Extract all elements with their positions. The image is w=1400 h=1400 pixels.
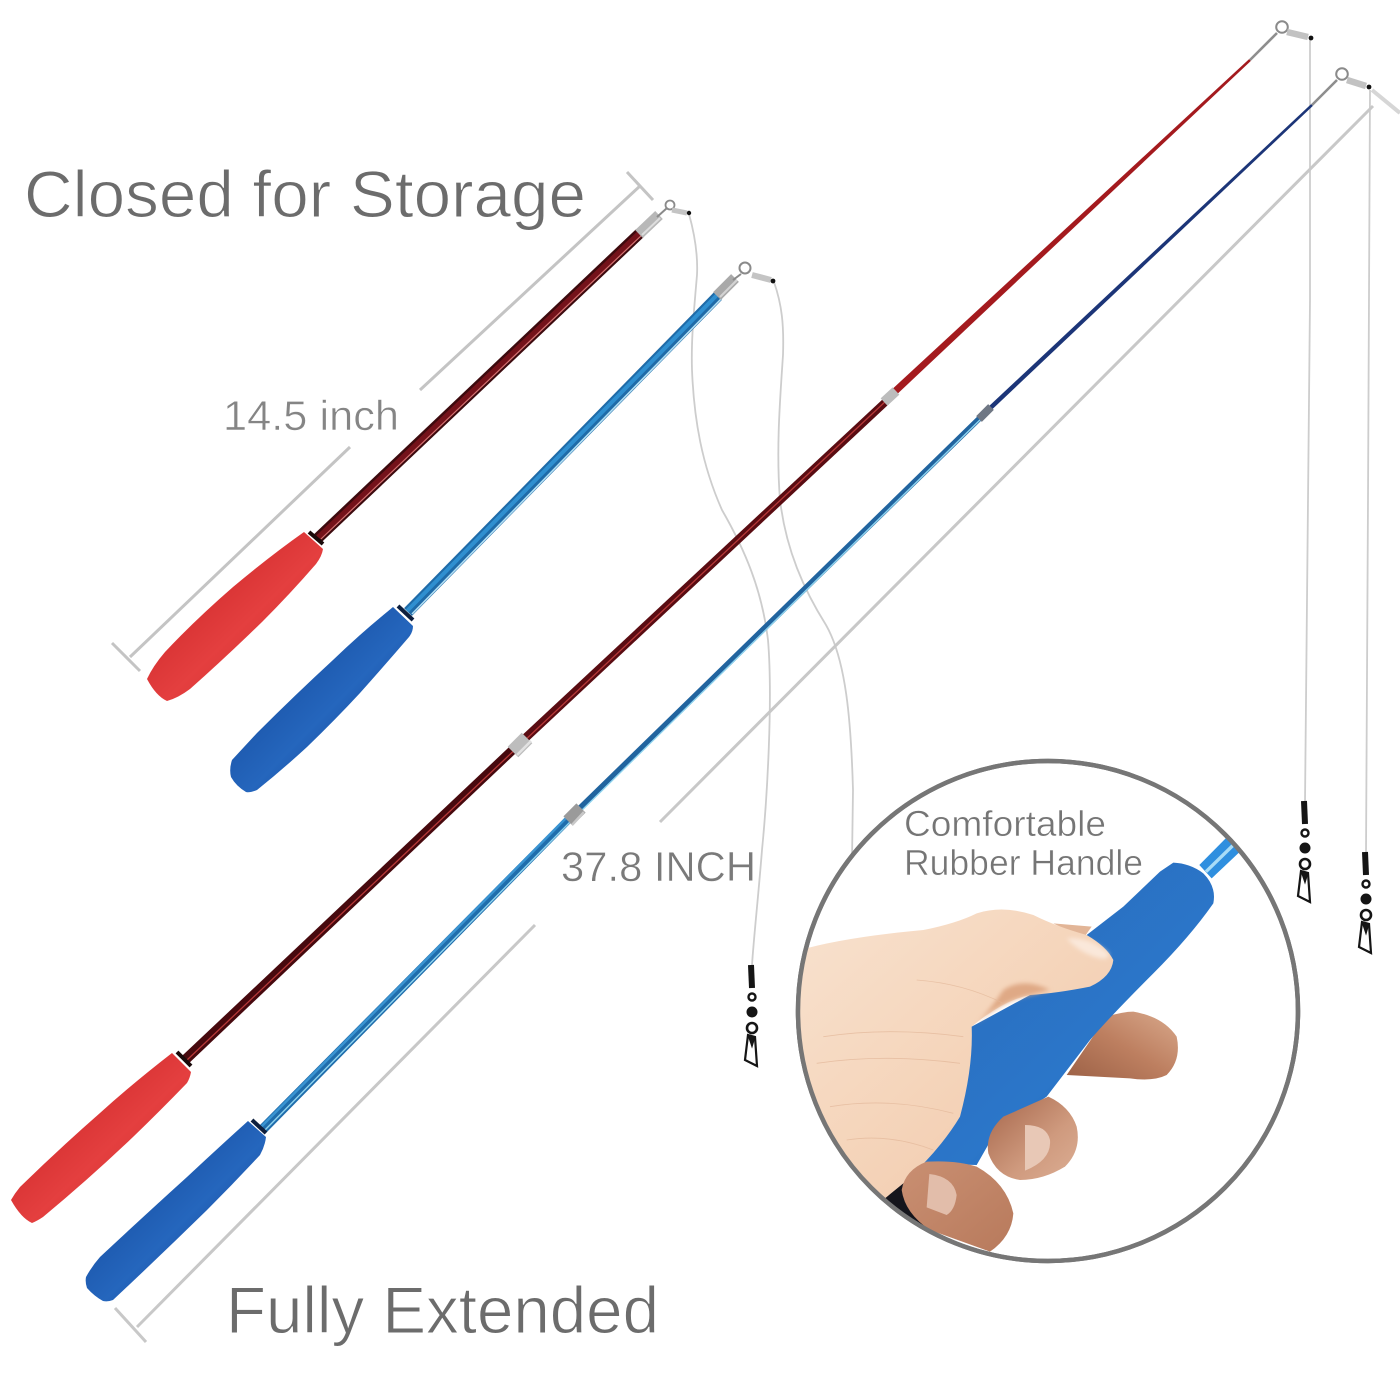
blue rod sections bbox=[258, 80, 1337, 1134]
middle finger behind handle bbox=[1067, 1012, 1178, 1079]
blue rod shaft bbox=[407, 295, 722, 614]
black rod end bbox=[886, 1182, 924, 1226]
blue foam grip bbox=[924, 862, 1214, 1165]
blue foam handle bbox=[230, 606, 413, 792]
knuckle behind thumb bbox=[1054, 923, 1092, 935]
index finger bbox=[902, 1161, 1013, 1252]
thumb shadow bbox=[977, 983, 1050, 1023]
palm crease lines bbox=[817, 980, 1003, 1150]
heading: fully extended: Fully Extended bbox=[226, 1273, 659, 1347]
callout: comfortable rubber handle: Comfortable bbox=[904, 803, 1106, 844]
red rod shaft bbox=[318, 233, 643, 539]
red foam handle bbox=[147, 532, 323, 701]
callout: comfortable rubber handle bbox=[904, 803, 1143, 883]
ring finger bbox=[988, 1097, 1078, 1180]
label: closed length: 14.5 inch bbox=[223, 392, 399, 439]
swivel clip: long blue string bbox=[1359, 852, 1371, 953]
circle border over photo bbox=[798, 761, 1298, 1261]
blue foam handle bbox=[86, 1120, 266, 1301]
ring finger nail bbox=[1025, 1125, 1050, 1171]
blue rod tip bbox=[1336, 68, 1371, 89]
red rod tip bbox=[639, 200, 691, 235]
swivel clip: first string bbox=[745, 965, 757, 1066]
closed length dimension line bbox=[112, 172, 653, 671]
circle background and border bbox=[798, 761, 1298, 1261]
closed blue rod bbox=[230, 262, 775, 792]
label: extended length: 37.8 INCH bbox=[561, 843, 756, 890]
red rod sections bbox=[182, 33, 1277, 1064]
palm and thumb bbox=[790, 910, 1113, 1198]
red foam handle bbox=[11, 1052, 191, 1223]
blue rod tip bbox=[717, 262, 775, 297]
panel: handle close-up circle bbox=[790, 761, 1298, 1261]
blue rod in grip bbox=[1199, 837, 1240, 878]
extended red rod bbox=[11, 21, 1313, 1223]
index finger nail bbox=[927, 1174, 957, 1215]
thumb tip highlight bbox=[1067, 938, 1109, 959]
heading: closed for storage: Closed for Storage bbox=[24, 157, 586, 231]
callout: comfortable rubber handle: Rubber Handle bbox=[904, 842, 1143, 883]
hand gripping blue handle bbox=[790, 837, 1240, 1252]
closed red rod bbox=[147, 200, 691, 701]
fishing lines: hanging strings bbox=[689, 40, 1370, 965]
red rod tip bbox=[1276, 21, 1313, 40]
swivel clip: long red string bbox=[1298, 801, 1310, 902]
